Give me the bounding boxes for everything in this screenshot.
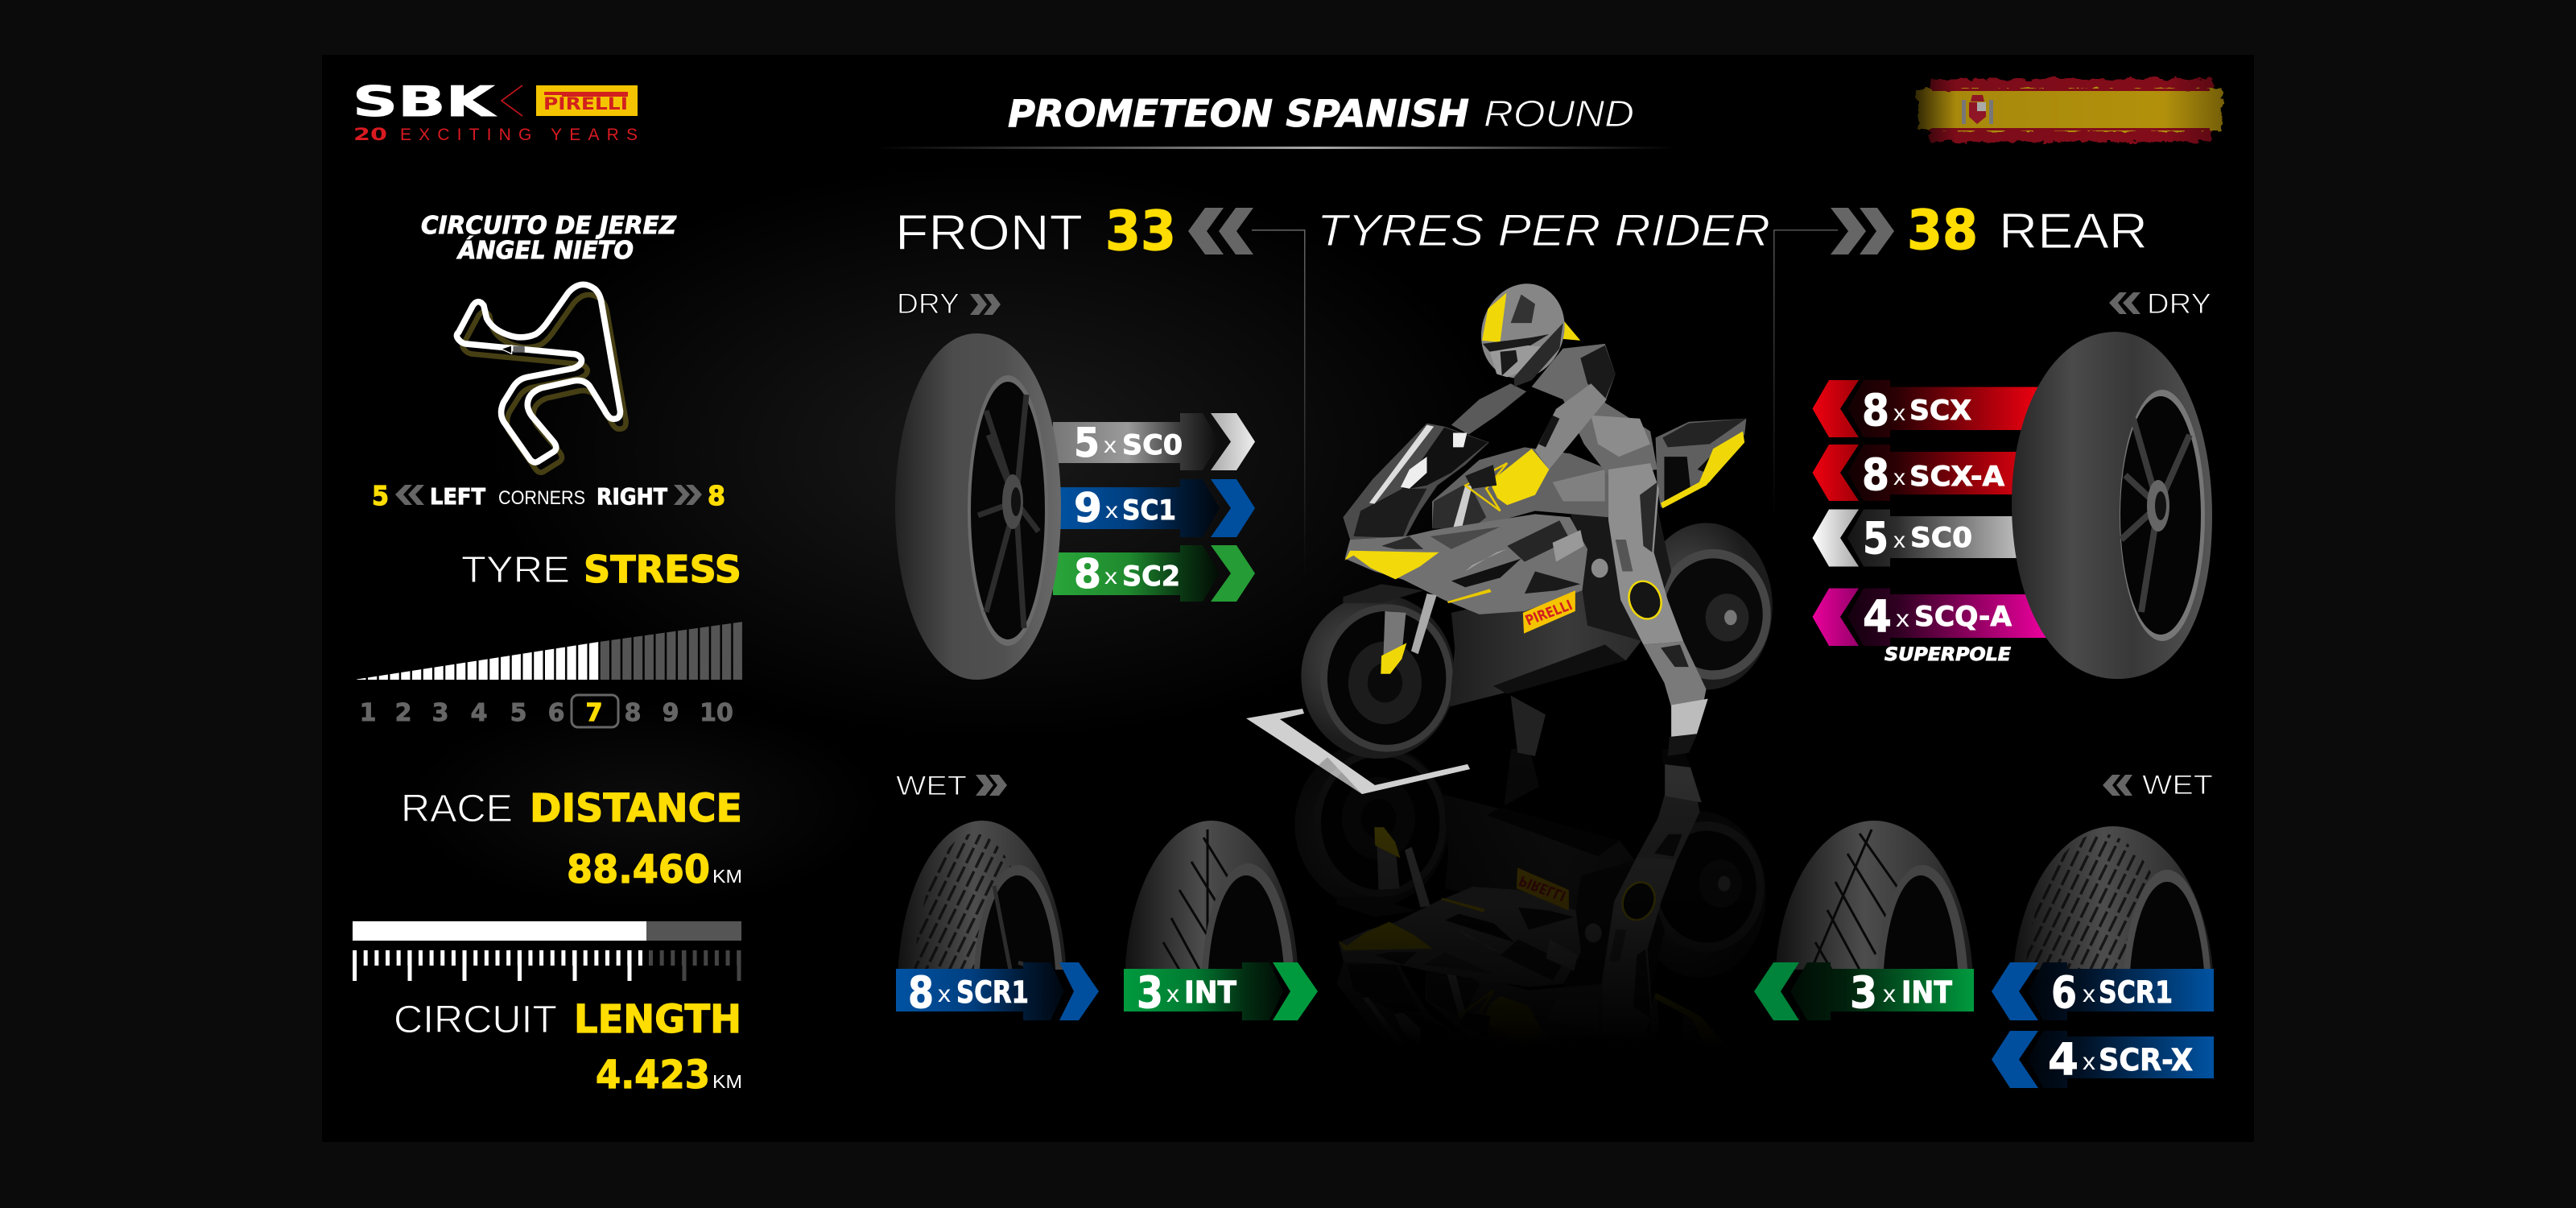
rear wheel [1640, 523, 1773, 690]
chart: tyre stress scale: 2 [395, 699, 411, 727]
reflection of bike [1294, 749, 1765, 1020]
rider body [1465, 344, 1708, 756]
tag: 8 x SCR1 front wet: 8 [908, 967, 934, 1018]
chart: tyre stress scale: 8 [625, 699, 641, 727]
tag: 8 x SCR1 front wet: x [938, 981, 951, 1007]
tag: 4 x SCQ-A superpole: x [1896, 606, 1909, 632]
heading: front 33 [895, 200, 1253, 263]
stand [1511, 696, 1546, 756]
corners: 5 left, 8 right: 5 [372, 480, 389, 511]
corners: 5 left, 8 right: 8 [708, 480, 725, 511]
tag: 8 x SCR1 front wet: SCR1 [956, 975, 1029, 1010]
heading: tyre stress: STRESS [584, 548, 741, 591]
rider far arm [1451, 383, 1526, 435]
front wheel [1301, 594, 1455, 759]
tag: 3 x INT rear wet: INT [1901, 975, 1953, 1010]
tag: 3 x INT front wet: INT [1184, 975, 1237, 1010]
flag: Spain [1912, 72, 2227, 148]
engine [1570, 507, 1671, 641]
nose fairing [1343, 424, 1489, 540]
label: rear wet: WET [2142, 770, 2213, 801]
corners: 5 left, 8 right: LEFT [430, 483, 485, 510]
tag: 5 x SC0 front: x [1104, 432, 1117, 457]
stat: circuit length: KM [712, 1071, 742, 1092]
tag: 8 x SCX-A: 8 [1862, 449, 1889, 500]
label: front dry [897, 288, 1001, 320]
start box lines foreground [1314, 743, 1470, 794]
tag: 4 x SCQ-A superpole [1813, 588, 2049, 665]
label: front dry: DRY [897, 288, 960, 320]
tag: 8 x SC2 front: SC2 [1122, 561, 1180, 593]
tag: 8 x SCX: 8 [1862, 385, 1889, 436]
tag: 3 x INT front wet [1124, 962, 1318, 1020]
heading: rear 38: 38 [1907, 199, 1978, 263]
Pirelli decal: PIRELLI [1523, 598, 1575, 629]
tag: 9 x SC1 front [1053, 479, 1255, 537]
stat: race distance: 88.460 [567, 847, 710, 892]
corners: 5 left, 8 right: RIGHT [597, 483, 667, 510]
tank [1432, 447, 1608, 528]
tag: 3 x INT front wet: x [1166, 981, 1179, 1007]
tyre: rear wet INT [1776, 821, 1972, 970]
stat: circuit length [394, 997, 742, 1098]
tyre: front wet INT [1125, 821, 1298, 969]
tag: 8 x SC2 front: x [1104, 564, 1117, 589]
chart: distance ruler [353, 921, 741, 981]
tyre: front wet SCR1 [898, 821, 1066, 970]
tag: 4 x SCR-X rear wet: 4 [2048, 1034, 2079, 1085]
heading: front 33: 33 [1105, 200, 1176, 263]
stat: race distance: KM [712, 866, 742, 887]
stat: circuit length: 4.423 [596, 1053, 710, 1098]
logo: SBK and Pirelli: 20 [353, 125, 387, 144]
heading: rear 38 [1831, 199, 2148, 263]
tag: 6 x SCR1 rear wet: SCR1 [2099, 975, 2173, 1010]
tyre: front dry slick [895, 333, 1061, 680]
motorcycle and rider [1301, 276, 1773, 759]
chart: tyre stress scale: 7 [586, 699, 602, 727]
heading: tyre stress [461, 548, 741, 591]
tag: 8 x SCR1 front wet [896, 962, 1099, 1020]
tag: 4 x SCQ-A superpole: SUPERPOLE [1885, 645, 2011, 665]
tag: 4 x SCR-X rear wet: x [2083, 1049, 2095, 1075]
logo: SBK and Pirelli [353, 78, 638, 144]
circuit name [421, 212, 677, 265]
heading: front 33: FRONT [895, 205, 1083, 261]
tyre: rear dry slick [2012, 332, 2212, 679]
lower bodywork [1450, 584, 1643, 706]
connector: front [1252, 230, 1306, 576]
tag: 3 x INT rear wet: x [1883, 981, 1896, 1007]
logo: SBK and Pirelli: PIRELLI [543, 94, 628, 114]
label: rear dry: DRY [2147, 288, 2211, 320]
tag: 5 x SC0 rear: SC0 [1910, 522, 1972, 554]
title: ROUND [1484, 93, 1634, 134]
tag: 5 x SC0 rear [1813, 509, 2041, 567]
tag: 3 x INT rear wet [1754, 962, 1974, 1020]
logo: SBK and Pirelli: SBK [353, 78, 497, 126]
chart: tyre stress scale: 5 [510, 699, 526, 727]
connector: rear [1773, 230, 1838, 519]
tag: 8 x SC2 front [1053, 545, 1255, 602]
corners: 5 left, 8 right [372, 480, 725, 511]
heading: tyres per rider: TYRES PER RIDER [1317, 205, 1770, 255]
label: front wet: WET [896, 771, 967, 801]
track map [456, 284, 626, 473]
tag: 8 x SCX-A: x [1893, 465, 1905, 490]
tyre: rear wet SCR1 [2014, 826, 2213, 970]
chart: tyre stress scale: 10 [700, 699, 733, 727]
chart: tyre stress scale: 3 [432, 699, 448, 727]
label: front wet [896, 771, 1007, 801]
tag: 5 x SC0 front: 5 [1074, 420, 1100, 466]
tag: 6 x SCR1 rear wet [1992, 962, 2214, 1020]
tag: 5 x SC0 rear: x [1893, 527, 1905, 552]
tag: 5 x SC0 front: SC0 [1122, 429, 1183, 461]
tag: 4 x SCQ-A superpole: SCQ-A [1914, 601, 2013, 633]
tag: 4 x SCQ-A superpole: 4 [1863, 591, 1892, 642]
tail [1656, 419, 1746, 508]
circuit name: ÁNGEL NIETO [456, 236, 634, 265]
chart: tyre stress scale [354, 622, 743, 727]
label: rear wet [2103, 770, 2213, 801]
tag: 9 x SC1 front: 9 [1074, 485, 1102, 532]
stat: circuit length: CIRCUIT [394, 999, 557, 1041]
tag: 8 x SCX: x [1893, 400, 1905, 425]
chart: tyre stress scale: 4 [471, 699, 487, 727]
tag: 6 x SCR1 rear wet: x [2083, 981, 2095, 1007]
label: rear dry [2109, 288, 2211, 320]
title [875, 92, 1677, 149]
fork and fender [1343, 584, 1437, 674]
corners: 5 left, 8 right: CORNERS [498, 487, 585, 509]
tag: 8 x SCX [1813, 380, 2041, 437]
chart: tyre stress scale: 1 [360, 699, 376, 727]
helmet [1472, 276, 1580, 387]
Pirelli decal [1523, 590, 1575, 634]
heading: rear 38: REAR [1999, 204, 2148, 259]
stat: race distance: RACE [401, 788, 513, 830]
tag: 5 x SC0 front [1053, 413, 1255, 470]
tag: 6 x SCR1 rear wet: 6 [2051, 967, 2077, 1018]
logo: SBK and Pirelli: EXCITING YEARS [400, 126, 638, 144]
chart: tyre stress scale: 6 [548, 699, 564, 727]
tag: 3 x INT rear wet: 3 [1850, 967, 1877, 1018]
tag: 8 x SCX: SCX [1909, 395, 1971, 427]
tag: 9 x SC1 front: x [1105, 498, 1118, 523]
start box lines [1246, 709, 1470, 794]
tag: 8 x SC2 front: 8 [1074, 551, 1101, 598]
tag: 5 x SC0 rear: 5 [1863, 513, 1889, 564]
tag: 8 x SCX-A: SCX-A [1909, 461, 2005, 493]
stat: circuit length: LENGTH [574, 997, 741, 1042]
tag: 4 x SCR-X rear wet [1992, 1031, 2214, 1088]
tag: 9 x SC1 front: SC1 [1122, 494, 1176, 527]
side fairing [1345, 514, 1587, 614]
stat: race distance [401, 786, 742, 892]
circuit name: CIRCUITO DE JEREZ [421, 212, 677, 240]
heading: tyre stress: TYRE [461, 548, 570, 590]
tag: 3 x INT front wet: 3 [1137, 967, 1163, 1018]
stat: race distance: DISTANCE [530, 786, 742, 831]
tag: 8 x SCX-A [1813, 445, 2041, 501]
chart: tyre stress scale: 9 [663, 699, 679, 727]
title: PROMETEON SPANISH [1008, 92, 1469, 135]
tag: 4 x SCR-X rear wet: SCR-X [2099, 1043, 2193, 1078]
